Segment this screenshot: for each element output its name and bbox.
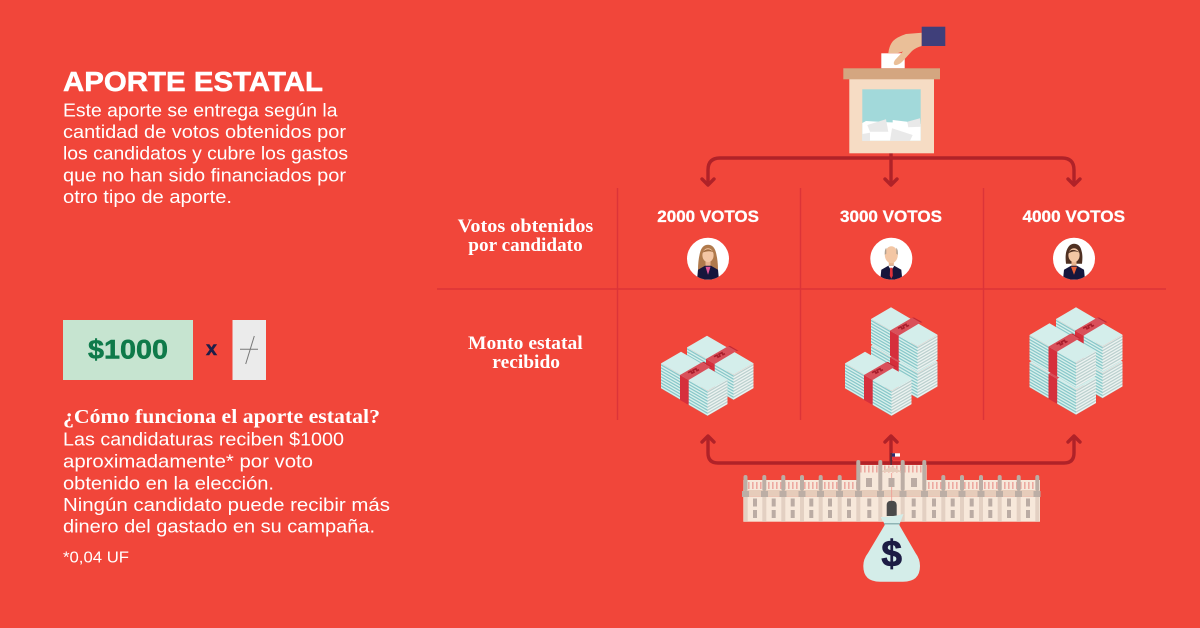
how it works body: obtenido en la elección.: [63, 472, 274, 494]
papers inside box: [862, 118, 921, 141]
row label: amount: recibido: [492, 352, 560, 373]
flag: [890, 453, 900, 466]
icon: money bag: [863, 514, 920, 582]
row label: votes: [458, 216, 593, 256]
wing balustrade: [745, 482, 1038, 489]
icon: woman candidate with dark hair: [1053, 238, 1095, 280]
money: 2000 votes: [661, 336, 754, 416]
row label: amount: [468, 333, 583, 373]
bottom arrows: palace to money: [702, 436, 1080, 463]
how it works body: [63, 428, 390, 536]
intro text block: que no han sido financiados por: [63, 164, 346, 186]
icon: woman candidate with long hair: [687, 238, 729, 280]
pediment: [880, 466, 903, 472]
windows: [753, 478, 1030, 518]
box lid: [843, 68, 940, 79]
column heading: 3000 votes: 3000 VOTOS: [840, 208, 942, 226]
ground floor pillars: [744, 497, 1039, 522]
hand: [888, 33, 922, 65]
cornice: [743, 490, 1040, 497]
how it works heading: ¿Cómo funciona el aporte estatal?: [63, 406, 380, 428]
how it works body: Ningún candidato puede recibir más: [63, 494, 390, 515]
top arrows: ballot box to candidates: [702, 150, 1080, 185]
box body: [849, 79, 934, 153]
ballot paper: [881, 53, 905, 68]
how it works body: dinero del gastado en su campaña.: [63, 516, 375, 536]
icon: government palace: [742, 453, 1040, 522]
footnote: *0,04 UF: [63, 550, 129, 566]
how it works body: aproximadamente* por voto: [63, 450, 313, 472]
intro text block: Este aporte se entrega según la: [63, 100, 338, 120]
row label: votes: por candidato: [468, 235, 583, 256]
column heading: 2000 votes: 2000 VOTOS: [657, 208, 759, 226]
ground floor: [743, 497, 1040, 522]
how it works body: Las candidaturas reciben $1000: [63, 428, 344, 450]
intro text block: otro tipo de aporte.: [63, 186, 232, 207]
title: APORTE ESTATAL: [63, 66, 323, 97]
dollar sign: $: [881, 533, 902, 574]
column heading: 4000 votes: 4000 VOTOS: [1022, 208, 1125, 226]
money: 4000 votes: [1030, 307, 1122, 415]
central axis line: [890, 473, 893, 501]
multiply sign: x: [206, 339, 217, 360]
formula: amount times ballot: [63, 320, 266, 380]
intro text block: [63, 100, 348, 207]
how it works text block: [63, 406, 390, 566]
wing upper floor: [743, 480, 1040, 490]
table grid: [437, 188, 1166, 420]
intro text block: los candidatos y cubre los gastos: [63, 142, 348, 164]
money: 3000 votes: [845, 307, 938, 416]
icon: marked ballot: [232, 320, 266, 380]
amount box: $1000: [88, 334, 168, 364]
door: [887, 501, 897, 516]
sleeve: [922, 27, 945, 46]
amount box: [63, 320, 193, 380]
row label: amount: Monto estatal: [468, 333, 583, 354]
icon: man candidate: [870, 238, 912, 280]
pillar capitals and upper columns: [742, 460, 1040, 497]
central balustrade: [858, 466, 925, 472]
row label: votes: Votos obtenidos: [458, 216, 593, 237]
central block: [857, 465, 927, 490]
intro text block: cantidad de votos obtenidos por: [63, 121, 346, 142]
icon: ballot box: [843, 27, 945, 153]
box window: [862, 89, 921, 141]
